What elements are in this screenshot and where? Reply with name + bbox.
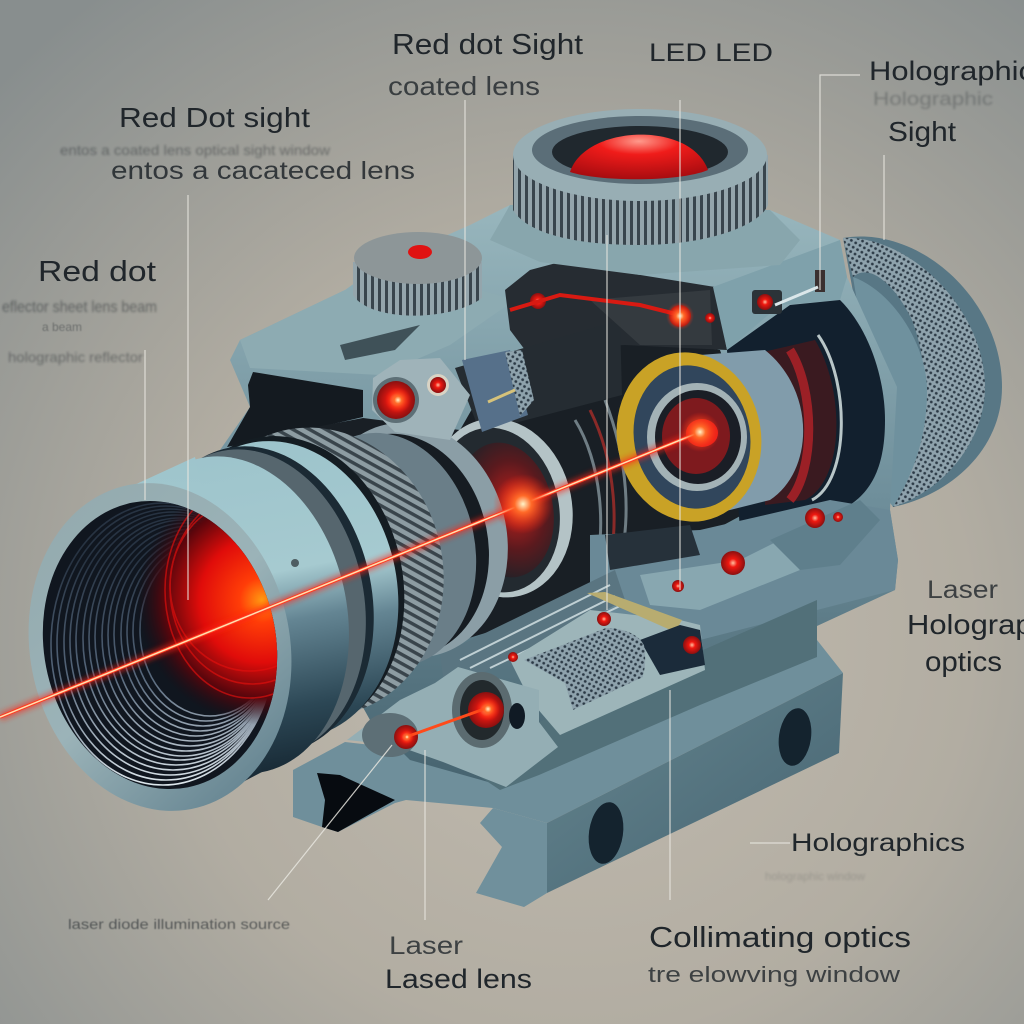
rear cavity: [727, 300, 885, 530]
front tube: [28, 428, 444, 811]
label: laser lens: Laser: [389, 932, 463, 960]
holographic lens: [603, 341, 775, 533]
label: red dot sight lens: [60, 102, 415, 185]
label: red dot: a beam: [42, 320, 82, 334]
label: holographic sight: Holographic: [873, 89, 993, 109]
top plate highlight: [240, 290, 515, 375]
label: red dot sight lens: Red Dot sight: [119, 102, 310, 133]
label: LED: LED LED: [649, 39, 773, 67]
mounting rail: [293, 640, 843, 907]
label: laser holographic optics: optics: [925, 646, 1002, 677]
label: faint caption right: holographic window: [765, 871, 865, 883]
laser beam: [0, 302, 720, 744]
label: red dot: [2, 256, 157, 365]
icon: red dome: [570, 135, 708, 179]
label: holographic sight: Sight: [888, 116, 956, 147]
label: red dot sight coated lens: coated lens: [388, 71, 540, 101]
side knob: [353, 232, 482, 316]
label: laser holographic optics: [907, 576, 1024, 677]
middle lens assembly: [274, 406, 588, 683]
label: red dot sight lens: entos a cacateced lens: [111, 157, 415, 185]
leader lines: [145, 75, 884, 920]
label: holographics: Holographics: [791, 829, 965, 857]
label: laser holographic optics: Laser: [927, 576, 998, 604]
label: red dot: holographic reflector: [8, 349, 143, 365]
label: red dot: Red dot: [38, 256, 156, 288]
label: red dot sight coated lens: Red dot Sight: [392, 29, 583, 61]
cavity gears: [575, 400, 626, 590]
lens block: [347, 667, 558, 787]
rear eyepiece: [843, 237, 1002, 507]
lower deck: [590, 500, 898, 640]
striped floor: [440, 570, 625, 690]
label: laser lens: [385, 932, 532, 994]
lower lens and mesh cylinder: [362, 628, 645, 757]
label: laser lens: Lased lens: [385, 964, 532, 994]
lens block detail: [372, 350, 534, 440]
indicator LEDs: [508, 270, 843, 662]
sight illustration: [0, 109, 1002, 907]
label: collimating optics: [648, 922, 911, 987]
upper cavity: [505, 262, 727, 350]
label: red dot sight lens: entos a coated lens optical sight window: [60, 142, 331, 158]
upper right box: [713, 240, 847, 350]
label: red dot sight coated lens: [388, 29, 583, 101]
main body: [220, 205, 898, 790]
lower channel: [510, 610, 705, 735]
label: holographic sight: Holographic: [869, 56, 1024, 86]
central cavity: [300, 330, 770, 650]
label: red dot: eflector sheet lens beam: [2, 299, 157, 316]
front lower face: [470, 600, 817, 790]
left cavity: [227, 372, 363, 447]
top turret: [490, 109, 800, 275]
label: collimating optics: Collimating optics: [649, 922, 911, 954]
label: holographic sight: [869, 56, 1024, 147]
label: faint caption: laser diode illumination source: [68, 916, 290, 932]
label: collimating optics: tre elowving window: [648, 962, 900, 987]
